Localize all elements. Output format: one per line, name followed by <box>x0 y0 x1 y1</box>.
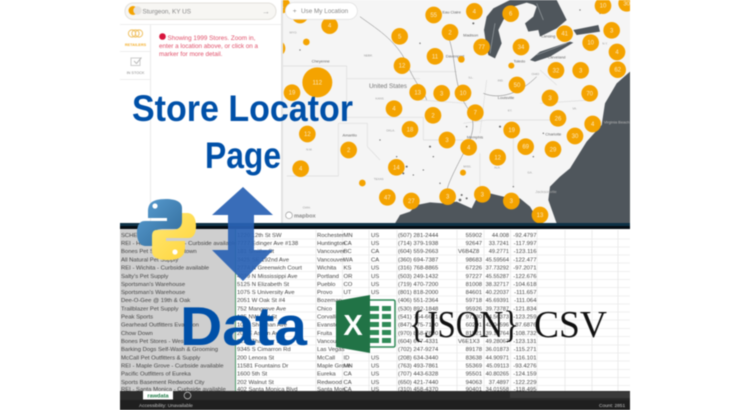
spreadsheet column: store names: Dee-O-Gee @ 19th & Oak <box>121 298 190 304</box>
spreadsheet column: country and phone: US <box>371 241 379 247</box>
map labels: KY. <box>508 109 512 113</box>
map cluster counts: 30 <box>623 1 631 7</box>
spreadsheet column: country and phone: US <box>371 290 379 296</box>
spreadsheet column: latitude: 37.73292 <box>486 266 509 272</box>
map cluster counts: 10 <box>587 41 595 47</box>
spreadsheet column: country and phone: US <box>371 356 379 362</box>
icon: excel logo <box>336 295 395 353</box>
spreadsheet column: latitude: 44.008 <box>492 233 509 239</box>
map labels: GA. <box>527 171 533 175</box>
use my location button: Use My Location <box>301 8 349 15</box>
spreadsheet column: longitude: -118.495 <box>514 387 537 393</box>
map labels: Amarillo <box>342 133 358 138</box>
spreadsheet column: addresses: 1075 S University Ave <box>237 290 295 296</box>
mapbox logo <box>286 212 317 219</box>
spreadsheet column: country and phone: (650) 421-7440 <box>398 380 439 386</box>
spreadsheet status bar <box>139 403 625 409</box>
spreadsheet column: postal code: 67226 <box>466 266 483 272</box>
store count notice: Showing 1999 Stores. Zoom in, <box>168 35 256 42</box>
spreadsheet column: country and phone: CA <box>371 258 379 264</box>
spreadsheet column: addresses: 9345 S Cimarron Rd <box>237 347 291 353</box>
spreadsheet column: city and state: Eureka <box>317 372 336 378</box>
spreadsheet column: country and phone <box>371 233 439 393</box>
spreadsheet column: longitude: -87.6876 <box>513 322 537 328</box>
spreadsheet column: longitude: -116.101 <box>514 356 536 362</box>
spreadsheet column: longitude: -117.997 <box>514 241 536 247</box>
spreadsheet column: country and phone: US <box>371 233 379 239</box>
tab: in stock: IN STOCK <box>127 71 145 75</box>
map cluster counts: 2 <box>347 148 351 154</box>
map cluster counts: 2 <box>431 113 435 119</box>
spreadsheet column: store names: Peak Sports <box>121 314 153 320</box>
map labels: Madison <box>463 33 478 38</box>
spreadsheet column: city and state: CA <box>344 387 352 393</box>
panel: spreadsheet: V6B4Z8 <box>458 249 480 255</box>
map labels: Memphis <box>467 134 483 139</box>
spreadsheet column: store names: SCHEELS <box>121 233 149 239</box>
map cluster counts: 62 <box>614 68 622 74</box>
spreadsheet column: addresses: 2774 N Greenwich Court <box>237 266 302 272</box>
spreadsheet column: latitude: 45.69391 <box>486 298 509 304</box>
map cluster counts: 69 <box>522 145 530 151</box>
spreadsheet column: city and state: Evanston <box>317 322 342 328</box>
map cluster counts: 5 <box>398 34 402 40</box>
spreadsheet column: postal code: 95501 <box>466 372 482 378</box>
spreadsheet column: country and phone: (702) 247-9274 <box>398 347 439 353</box>
label: json: {JSON} <box>409 304 519 346</box>
map labels: TEXAS <box>374 177 384 181</box>
spreadsheet column: store names: Pacific Outfitters of Eureka <box>121 372 191 378</box>
spreadsheet column: city and state: Santa Mon <box>317 387 346 393</box>
spreadsheet column: city and state: CA <box>344 380 352 386</box>
spreadsheet column: longitude: -92.4797 <box>513 233 536 239</box>
spreadsheet column: city and state: Rochester <box>317 233 344 239</box>
map cluster counts: 112 <box>313 80 323 86</box>
map state lines and rivers <box>284 66 584 186</box>
spreadsheet column: country and phone: (604) 677-4331 <box>398 339 438 345</box>
spreadsheet column: store names: REI - Santa Monica - Curbside available <box>121 387 226 393</box>
spreadsheet column: addresses: 1600 5th St <box>237 372 267 378</box>
search box: → <box>262 7 270 16</box>
spreadsheet column: city and state: CA <box>344 241 352 247</box>
spreadsheet column: city and state: Pueblo <box>317 282 336 288</box>
map labels: Toledo <box>513 58 526 63</box>
spreadsheet column: longitude: -123.116 <box>514 249 537 255</box>
map labels: Jacksonville <box>535 189 558 194</box>
map water: gulf and atlantic <box>395 72 630 223</box>
spreadsheet column: addresses: 2233 Thatcher St <box>237 339 282 345</box>
spreadsheet column: latitude: 44.90971 <box>486 356 509 362</box>
map labels: N.M. <box>306 148 313 152</box>
map labels: Charlotte <box>545 132 562 137</box>
spreadsheet column: latitude: 42.04596 <box>486 322 509 328</box>
spreadsheet column: store names: Bones Pet Store - Downtown <box>121 249 197 255</box>
spreadsheet column: city and state: OR <box>344 274 352 280</box>
spreadsheet column: postal code: 90401 <box>466 387 482 393</box>
map cluster counts: 4 <box>615 50 619 56</box>
spreadsheet column: longitude: -111.064 <box>514 298 537 304</box>
spreadsheet column: store names: REI - Huntington Beach - Curbside available <box>121 241 237 247</box>
spreadsheet column: country and phone: (541) 754-6671 <box>398 314 438 320</box>
map labels: WYO. <box>289 30 297 34</box>
spreadsheet column: longitude: -121.834 <box>513 306 537 312</box>
spreadsheet column: latitude: 45.09113 <box>486 364 509 370</box>
spreadsheet column: city and state: Maple Grove <box>317 364 351 370</box>
map cluster counts: 7 <box>474 111 478 117</box>
panel: locator sidebar <box>120 0 283 223</box>
map cluster counts: 32 <box>553 68 560 74</box>
map cluster counts: 18 <box>407 127 414 133</box>
map cluster counts: 19 <box>508 128 516 134</box>
use my location button: + <box>293 8 297 15</box>
map labels: Louisville <box>498 95 515 100</box>
map cluster counts: 4 <box>392 107 396 113</box>
spreadsheet column: addresses: 4039 N Mississippi Ave <box>237 274 298 280</box>
spreadsheet column: postal code: 84601 <box>466 290 482 296</box>
spreadsheet status bar: Count: 2851 <box>599 403 625 409</box>
spreadsheet column: postal code: 81008 <box>466 282 483 288</box>
spreadsheet column: longitude: -93.4276 <box>513 364 537 370</box>
map cluster counts: 4 <box>467 145 471 151</box>
spreadsheet status bar: Accessibility: Unavailable <box>139 403 193 409</box>
map cluster counts: 70 <box>586 91 594 97</box>
spreadsheet column: country and phone: (316) 768-8865 <box>398 266 439 272</box>
spreadsheet column: city and state: Corvallis <box>317 314 340 320</box>
spreadsheet column: city and state: Wichita <box>317 266 337 272</box>
spreadsheet column: longitude: -123.131 <box>513 339 536 345</box>
spreadsheet column: postal code: 55369 <box>466 364 482 370</box>
search box: Sturgeon, KY US <box>142 8 191 16</box>
spreadsheet column: country and phone: (360) 694-7387 <box>398 258 438 264</box>
map cluster counts: 6 <box>509 12 513 18</box>
map water: great lakes <box>484 0 600 62</box>
spreadsheet column: latitude <box>486 233 509 393</box>
spreadsheet column: latitude: 49.28067 <box>486 339 509 345</box>
map labels: Lansing <box>541 34 555 39</box>
spreadsheet column: postal code: 97227 <box>466 274 482 280</box>
spreadsheet column: city and state: Chico <box>317 306 333 312</box>
map cluster counts: 47 <box>384 195 391 201</box>
spreadsheet column: country and phone: (707) 443-6328 <box>398 372 439 378</box>
spreadsheet column: longitude: -122.676 <box>513 274 537 280</box>
map labels: Davenport <box>446 53 465 58</box>
spreadsheet column: latitude: 44.56373 <box>486 314 509 320</box>
spreadsheet column: country and phone: (801) 818-2000 <box>398 290 439 296</box>
spreadsheet column: store names: Barking Dogs Self-Wash & Grooming <box>121 347 218 353</box>
spreadsheet column: addresses: 402 Santa Monica Blvd <box>237 387 298 393</box>
spreadsheet column: store names: Sports Basement Redwood City <box>121 380 205 386</box>
spreadsheet column: country and phone: US <box>371 266 379 272</box>
spreadsheet column: longitude <box>513 233 537 393</box>
map cluster counts: 14 <box>393 165 400 171</box>
spreadsheet column: longitude: -97.2071 <box>513 266 536 272</box>
spreadsheet column: store names: Salty's Pet Supply <box>121 274 168 280</box>
map cluster counts <box>281 1 631 219</box>
spreadsheet column: country and phone: (507) 281-2444 <box>398 233 439 239</box>
spreadsheet column: latitude: 49.2771 <box>489 249 509 255</box>
spreadsheet column: country and phone: US <box>371 372 379 378</box>
spreadsheet column: longitude: -122.477 <box>513 258 536 264</box>
spreadsheet column: longitude: -115.271 <box>514 347 536 353</box>
spreadsheet column: city and state: Las Vegas <box>317 347 345 353</box>
map cluster counts: 12 <box>494 155 502 161</box>
spreadsheet column: postal code: 60201 <box>466 322 482 328</box>
spreadsheet column: city and state: McCall <box>317 356 335 362</box>
spreadsheet column: city and state: Bozeman <box>317 298 342 304</box>
panel: spreadsheet <box>120 223 630 410</box>
map labels: Eau Claire <box>442 9 462 14</box>
spreadsheet column: country and phone: (208) 634-3440 <box>398 356 439 362</box>
spreadsheet column: postal code: 98683 <box>466 258 483 264</box>
spreadsheet column: postal code <box>466 233 483 393</box>
spreadsheet column: city and state: Huntington <box>317 241 346 247</box>
spreadsheet column: country and phone: (847) 475-7100 <box>398 322 439 328</box>
map cluster counts: 3 <box>510 199 514 205</box>
spreadsheet column: city and state: Provo <box>317 290 333 296</box>
spreadsheet column: latitude: 36.01873 <box>486 347 509 353</box>
use my location button <box>285 3 357 19</box>
spreadsheet column: postal code: 59718 <box>466 298 483 304</box>
map labels: VA. <box>572 107 577 111</box>
spreadsheet column: latitude: 37.4897 <box>489 380 509 386</box>
map cluster counts: 3 <box>446 195 450 201</box>
spreadsheet column: country and phone: (970) 858-7890 <box>398 331 439 337</box>
map cluster counts: 27 <box>408 199 415 205</box>
spreadsheet column: country and phone: US <box>371 387 379 393</box>
spreadsheet column: store names: All Natural Pet Supply <box>121 258 178 264</box>
tab: retailers: RETAILERS <box>125 43 147 47</box>
map labels: ALA. <box>494 165 501 169</box>
spreadsheet column: postal code: 97330 <box>466 314 483 320</box>
spreadsheet column: store names: REI - Maple Grove - Curbside available <box>121 364 224 370</box>
spreadsheet column: postal code: 83638 <box>466 356 483 362</box>
spreadsheet column: city and state: WA <box>344 258 353 264</box>
spreadsheet column: addresses: 3425 SE 192nd Ave <box>237 258 290 264</box>
map labels: Cleveland <box>548 54 566 59</box>
tab: retailers <box>125 30 147 47</box>
spreadsheet column: addresses: 7777 Edinger Ave #138 <box>237 241 299 247</box>
spreadsheet column: addresses: 1000 Sherman Ave <box>237 322 288 328</box>
spreadsheet column: latitude: 45.59564 <box>486 258 509 264</box>
map cluster counts: 1 <box>281 3 285 9</box>
spreadsheet column: store names: Gearhead Outfitters Evanston <box>121 322 199 328</box>
spreadsheet column: store names: Bones Pet Stores - West End <box>121 339 198 345</box>
map cluster counts: 50 <box>514 83 521 89</box>
spreadsheet column: postal code: 55902 <box>466 233 482 239</box>
spreadsheet column: city and state: CO <box>344 282 353 288</box>
map labels: CHIH. <box>303 205 311 209</box>
spreadsheet column: country and phone: (714) 379-1938 <box>398 241 439 247</box>
map cluster counts: 3 <box>440 91 444 97</box>
spreadsheet column: store names: Chow Down <box>121 331 153 337</box>
spreadsheet column: latitude: 33.7241 <box>489 241 509 247</box>
map cluster counts: 4 <box>299 167 303 173</box>
map labels: N.Y. <box>602 41 608 45</box>
map cluster counts: 30 <box>572 134 579 140</box>
map labels: Virginia Beach <box>604 119 629 124</box>
map cluster counts: 3 <box>445 138 449 144</box>
spreadsheet column: addresses: 1220 12th St SW <box>237 233 282 239</box>
spreadsheet column: store names <box>121 233 237 393</box>
map cluster counts: 26 <box>555 116 562 122</box>
spreadsheet column: addresses: 135 NW 2nd St <box>237 314 277 320</box>
spreadsheet column: postal code: 94063 <box>466 380 483 386</box>
spreadsheet column: country and phone: (763) 493-7861 <box>398 364 438 370</box>
spreadsheet column: postal code: 95926 <box>466 306 483 312</box>
spreadsheet column: latitude: 39.73787 <box>486 306 509 312</box>
label: csv: CSV <box>534 304 608 346</box>
panel: store locator map <box>269 0 635 223</box>
spreadsheet column: city and state: Redwood <box>317 380 342 386</box>
spreadsheet column: city and state: UT <box>344 290 352 296</box>
spreadsheet column: city and state: MN <box>344 364 353 370</box>
spreadsheet column: city and state: Vancouver <box>317 249 345 255</box>
spreadsheet grid <box>237 230 630 391</box>
spreadsheet column: store names: Sportsman's Warehouse <box>121 282 186 288</box>
heading: store locator page: Page <box>205 135 281 176</box>
spreadsheet column: store names: Trailblazer Pet Supply <box>121 306 178 312</box>
spreadsheet tab bar <box>120 391 630 410</box>
map cluster counts: 3 <box>481 192 485 198</box>
map cluster counts: 29 <box>550 147 557 153</box>
spreadsheet column: addresses: 200 E Aspen Ave <box>237 331 282 337</box>
spreadsheet column: country and phone: CA <box>371 249 379 255</box>
spreadsheet column: city and state: Portland <box>317 274 339 280</box>
spreadsheet column: city and state: KS <box>344 266 351 272</box>
map cluster counts: 2 <box>448 30 452 36</box>
spreadsheet column: city and state: Vancouver <box>317 258 345 264</box>
spreadsheet column: latitude: 40.22037 <box>486 290 509 296</box>
heading: store locator page: Store Locator <box>132 88 353 129</box>
spreadsheet column: city and state: MN <box>344 233 353 239</box>
spreadsheet column: postal code: 81521 <box>466 331 482 337</box>
map labels <box>289 9 629 209</box>
icon: excel logo: X <box>343 310 363 342</box>
spreadsheet column: addresses: 752 Mangrove Ave <box>237 306 287 312</box>
spreadsheet column: addresses: 11581 Fountains Dr <box>237 364 288 370</box>
map labels: OHIO <box>532 72 540 76</box>
store count notice: enter a location above, or click on a <box>159 43 259 50</box>
spreadsheet column: addresses: 202 Walnut St <box>237 380 274 386</box>
spreadsheet column: longitude: -111.657 <box>514 290 536 296</box>
spreadsheet column: country and phone: US <box>371 282 379 288</box>
map cluster counts: 13 <box>414 90 422 96</box>
heading: store locator page <box>132 88 353 176</box>
map cluster counts: 3 <box>610 28 614 34</box>
spreadsheet column: country and phone: (719) 470-7200 <box>398 282 439 288</box>
spreadsheet column: country and phone: (530) 892-1848 <box>398 306 439 312</box>
spreadsheet column: addresses: 2051 W Oak St #4 <box>237 298 286 304</box>
spreadsheet column: city and state <box>317 233 353 393</box>
map cluster counts: 19 <box>289 91 296 97</box>
map labels: MISS. <box>463 165 472 169</box>
spreadsheet column: latitude: 34.01558 <box>486 387 509 393</box>
map cluster counts: 4 <box>328 24 332 30</box>
map cluster counts: 10 <box>600 4 607 10</box>
spreadsheet column: store names: Sportsman's Warehouse <box>121 290 186 296</box>
map cluster counts: 34 <box>518 45 525 51</box>
spreadsheet column: country and phone: (604) 559-2663 <box>398 249 439 255</box>
spreadsheet column: latitude: 39.15764 <box>486 331 509 337</box>
map cluster counts: 3 <box>579 68 583 74</box>
map labels: Cheyenne <box>312 59 331 64</box>
spreadsheet column: longitude: -108.732 <box>513 331 536 337</box>
spreadsheet column: country and phone: (406) 551-2364 <box>398 298 439 304</box>
arrow: two-way store to data <box>212 187 273 281</box>
tab: in stock <box>127 58 145 75</box>
spreadsheet column: longitude: -124.159 <box>513 372 536 378</box>
spreadsheet column: addresses: 5125 N Elizabeth St <box>237 282 289 288</box>
map labels: OKLA. <box>386 129 395 133</box>
spreadsheet column: city and state: CA <box>344 372 352 378</box>
spreadsheet column: city and state: Fruita <box>317 331 333 337</box>
spreadsheet column: country and phone: (503) 249-1432 <box>398 274 438 280</box>
spreadsheet column: longitude: -123.259 <box>513 314 536 320</box>
spreadsheet column: country and phone: US <box>371 364 379 370</box>
spreadsheet column: store names: REI - Wichita - Curbside available <box>121 266 210 272</box>
map cluster counts: 3 <box>548 96 552 102</box>
map labels: IND. <box>498 79 504 83</box>
store count notice <box>159 33 259 58</box>
map cluster counts: 12 <box>304 132 311 138</box>
store count notice: marker for more detail. <box>159 51 223 58</box>
map cluster counts: 12 <box>399 64 406 70</box>
spreadsheet column: country and phone: (310) 458-4370 <box>398 387 439 393</box>
map cluster counts: 10 <box>460 91 467 97</box>
spreadsheet column: city and state: BC <box>344 249 352 255</box>
spreadsheet column: country and phone: US <box>371 380 379 386</box>
mapbox logo: mapbox <box>294 213 317 219</box>
map labels: United States <box>369 83 407 90</box>
map cluster markers <box>269 0 635 223</box>
map cluster counts: 13 <box>537 213 544 219</box>
map cluster counts: 11 <box>432 54 439 60</box>
map cluster counts: 55 <box>430 13 438 19</box>
map cluster counts: 4 <box>473 9 477 15</box>
icon: python logo <box>137 199 196 260</box>
spreadsheet column: latitude: 38.32717 <box>486 282 509 288</box>
spreadsheet column: latitude: 40.80265 <box>486 372 509 378</box>
map cluster counts: 77 <box>478 45 486 51</box>
panel: spreadsheet: V6E1X3 <box>458 339 480 345</box>
spreadsheet column: longitude: -104.618 <box>513 282 537 288</box>
infographic canvas <box>119 0 631 410</box>
spreadsheet column: city and state: Vancouver <box>317 339 345 345</box>
spreadsheet column: postal code: 89178 <box>466 347 483 353</box>
map labels: ILL. <box>469 76 474 80</box>
spreadsheet column: store names: McCall Pet Outfitters & Supply <box>121 356 200 362</box>
spreadsheet column: postal code: 92647 <box>466 241 482 247</box>
spreadsheet column: country and phone: US <box>371 274 379 280</box>
spreadsheet column: longitude: -122.229 <box>513 380 536 386</box>
spreadsheet column: city and state: ID <box>344 356 349 362</box>
search box <box>125 3 276 20</box>
spreadsheet column: addresses <box>237 233 302 393</box>
map labels: NEBR. <box>364 53 373 57</box>
spreadsheet column: addresses: 181 Smithe St <box>237 249 274 255</box>
spreadsheet column: latitude: 45.55287 <box>486 274 509 280</box>
spreadsheet tab bar: rawdata <box>147 394 169 400</box>
heading: data: Data <box>180 295 307 357</box>
map cluster counts: 41 <box>561 32 569 38</box>
map labels: KANS. <box>376 96 385 100</box>
map cluster counts: 4 <box>591 122 595 128</box>
spreadsheet column: addresses: 200 Lenora St <box>237 356 274 362</box>
